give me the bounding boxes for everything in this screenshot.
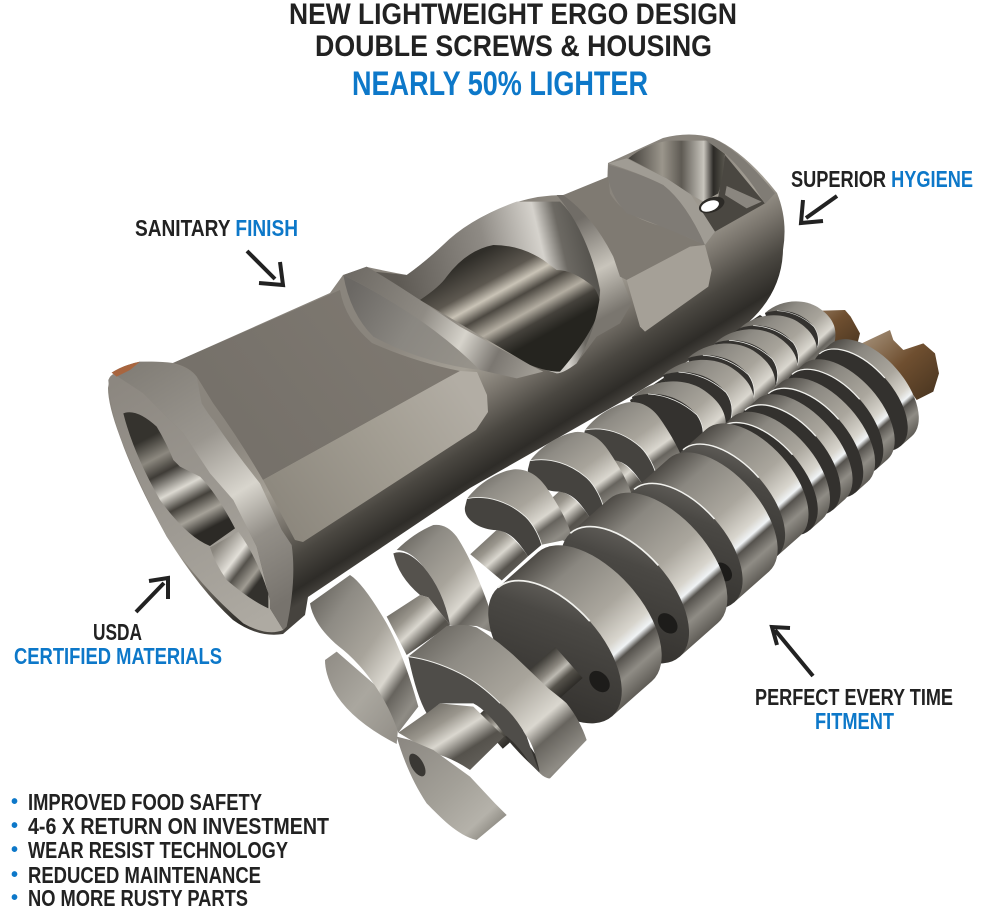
rear small flights bbox=[632, 301, 835, 469]
flight rim bbox=[408, 625, 587, 778]
shaft bbox=[398, 703, 504, 770]
through hole bbox=[697, 194, 727, 216]
benefits list: • bbox=[11, 839, 18, 861]
second lug band bbox=[608, 158, 715, 245]
small flights bbox=[692, 322, 937, 554]
arrow: perfect every time bbox=[772, 627, 813, 676]
title: DOUBLE SCREWS & HOUSING bbox=[315, 30, 712, 63]
rear dark backing bbox=[630, 315, 827, 473]
benefits list: • bbox=[11, 791, 18, 813]
wing hole bbox=[406, 751, 429, 779]
benefits list: IMPROVED FOOD SAFETY bbox=[28, 789, 262, 815]
lower bore lobe bbox=[210, 532, 268, 608]
label: perfect every time fitment: FITMENT bbox=[815, 708, 894, 734]
window right rim bbox=[557, 195, 632, 363]
large flights bbox=[421, 404, 829, 785]
label: sanitary finish: SANITARY FINISH bbox=[135, 215, 298, 241]
label: usda certified materials: USDA bbox=[93, 619, 142, 645]
benefits list: 4-6 X RETURN ON INVESTMENT bbox=[28, 813, 329, 839]
title: NEARLY 50% LIGHTER bbox=[352, 65, 648, 103]
arrow: superior hygiene bbox=[801, 196, 837, 223]
flight inner hook bbox=[505, 733, 549, 779]
first rear flight bbox=[310, 575, 418, 733]
chamfer face bbox=[263, 371, 488, 542]
arrow: usda bbox=[136, 578, 168, 612]
housing bbox=[108, 134, 785, 635]
second lug crescent bbox=[608, 165, 705, 245]
label: usda certified materials: CERTIFIED MATERIALS bbox=[14, 643, 222, 669]
end ring band bbox=[703, 138, 775, 204]
window wall bbox=[373, 202, 600, 373]
benefits list: • bbox=[11, 864, 18, 886]
label: perfect every time fitment: PERFECT EVERY TIME bbox=[755, 684, 953, 710]
copper edge glint bbox=[112, 362, 140, 377]
benefits list: • bbox=[11, 815, 18, 837]
housing front end bbox=[108, 362, 293, 632]
lug band bbox=[343, 267, 543, 378]
upper bore lobe bbox=[123, 412, 235, 546]
window bore bbox=[420, 245, 600, 372]
housing windows bbox=[343, 138, 775, 378]
rear large flights bbox=[465, 402, 685, 580]
rear screw bbox=[310, 301, 860, 744]
first rear flights and end plate bbox=[310, 525, 498, 744]
end opening dark face bbox=[700, 155, 765, 232]
flight face bbox=[408, 657, 540, 773]
benefits list bbox=[11, 789, 329, 909]
nearest flight and end wing bbox=[397, 625, 587, 840]
label: perfect every time fitment bbox=[755, 684, 953, 734]
front ring face bbox=[108, 373, 283, 632]
top flat face bbox=[173, 290, 460, 480]
label: superior hygiene: SUPERIOR HYGIENE bbox=[791, 166, 973, 192]
lug crescent bbox=[343, 275, 480, 370]
second rear flight bbox=[397, 525, 498, 635]
shaft bbox=[387, 595, 450, 655]
arrow: sanitary finish bbox=[247, 251, 283, 285]
title bbox=[289, 0, 737, 103]
housing body bbox=[108, 134, 785, 635]
brushed ring band bbox=[112, 362, 293, 630]
rear drive tip bbox=[793, 303, 860, 353]
front drive tip bbox=[862, 330, 939, 400]
second flat bbox=[563, 177, 705, 280]
front screw bbox=[397, 322, 939, 840]
benefits list: • bbox=[11, 887, 18, 909]
second chamfer bbox=[627, 245, 712, 332]
benefits list: WEAR RESIST TECHNOLOGY bbox=[28, 837, 288, 863]
end plate bbox=[325, 652, 400, 744]
end opening cylinder bbox=[628, 141, 725, 202]
end wing bbox=[397, 737, 507, 840]
label: usda certified materials bbox=[14, 619, 222, 669]
end opening panel bbox=[725, 186, 762, 208]
benefits list: REDUCED MAINTENANCE bbox=[28, 862, 261, 888]
